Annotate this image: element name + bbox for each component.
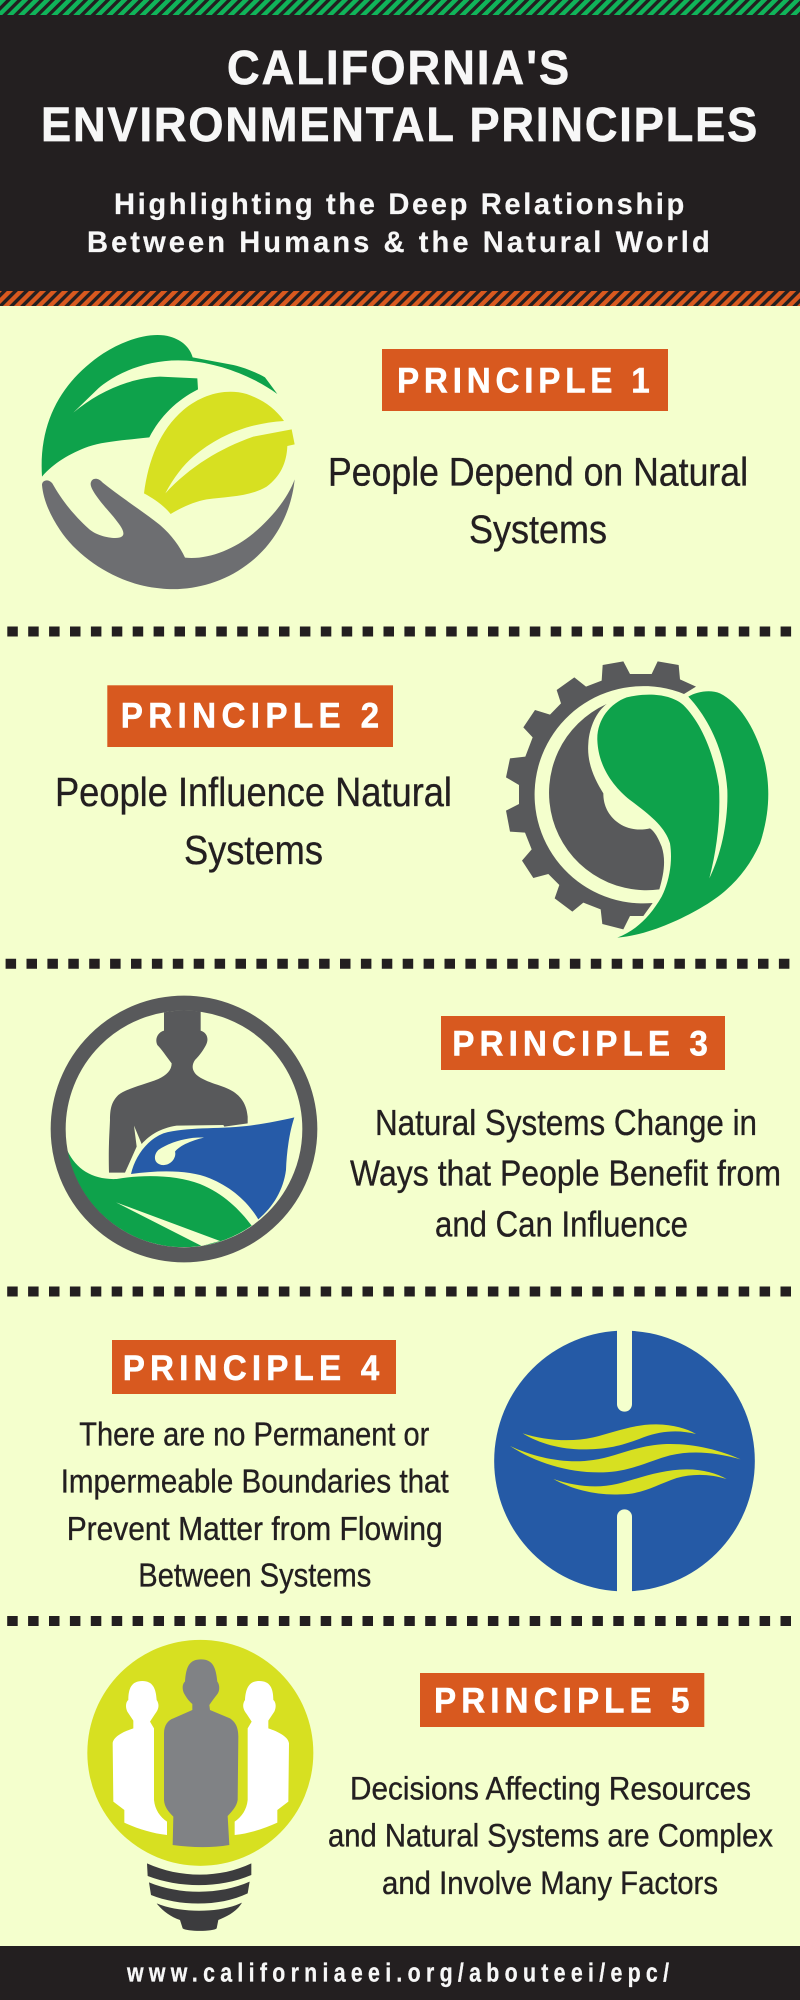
text: principle 5: and Involve Many Factors [382, 1865, 718, 1901]
divider 3 [7, 1286, 793, 1296]
footer [0, 1946, 800, 2000]
panel: principle 1 [42, 335, 748, 589]
text: principle 5: Decisions Affecting Resources [350, 1770, 751, 1806]
divider 4 [7, 1616, 793, 1626]
icon: light bulb with people [87, 1640, 313, 1931]
text: principle 4: Between Systems [138, 1557, 371, 1594]
badge: principle 5 [420, 1673, 704, 1727]
footer url: www.californiaeei.org/abouteei/epc/ [126, 1959, 669, 1988]
icon: hand holding leaves [42, 335, 295, 589]
text: principle 1: Systems [469, 508, 607, 552]
badge: principle 4 [112, 1340, 396, 1394]
text: principle 2: People Influence Natural [55, 769, 452, 815]
badge: principle 2 [107, 685, 393, 747]
icon: person with leaves in a ring [58, 1003, 310, 1255]
badge: principle 3: PRINCIPLE 3 [452, 1025, 708, 1064]
icon: gear and leaf [506, 661, 768, 938]
icon: blue circle with flowing waves [494, 1327, 755, 1595]
panel: principle 2 [55, 661, 768, 938]
text: principle 1 [328, 451, 748, 552]
title: CALIFORNIA'S [227, 41, 569, 94]
text: principle 3 [350, 1102, 781, 1245]
badge: principle 4: PRINCIPLE 4 [123, 1349, 379, 1388]
title: ENVIRONMENTAL PRINCIPLES [41, 98, 757, 151]
panel: principle 3 [58, 1003, 781, 1255]
text: principle 4: There are no Permanent or [79, 1416, 429, 1453]
badge: principle 3 [441, 1016, 725, 1070]
text: principle 5 [328, 1770, 773, 1901]
subtitle: Between Humans & the Natural World [87, 226, 710, 259]
badge: principle 1 [382, 349, 668, 411]
text: principle 2 [55, 769, 452, 873]
badge: principle 1: PRINCIPLE 1 [397, 362, 650, 401]
divider 1 [7, 626, 793, 636]
text: principle 3: and Can Influence [435, 1204, 688, 1245]
header panel [0, 0, 800, 306]
title [41, 41, 757, 151]
panel: principle 4 [61, 1327, 755, 1595]
text: principle 2: Systems [184, 827, 323, 873]
text: principle 4: Prevent Matter from Flowing [67, 1510, 443, 1547]
divider 2 [6, 959, 793, 969]
text: principle 1: People Depend on Natural [328, 451, 748, 495]
text: principle 4 [61, 1416, 449, 1594]
badge: principle 2: PRINCIPLE 2 [121, 697, 379, 736]
subtitle [87, 188, 710, 259]
subtitle: Highlighting the Deep Relationship [114, 188, 684, 221]
panel: principle 5 [87, 1640, 773, 1931]
badge: principle 5: PRINCIPLE 5 [434, 1682, 690, 1721]
text: principle 4: Impermeable Boundaries that [61, 1463, 449, 1500]
